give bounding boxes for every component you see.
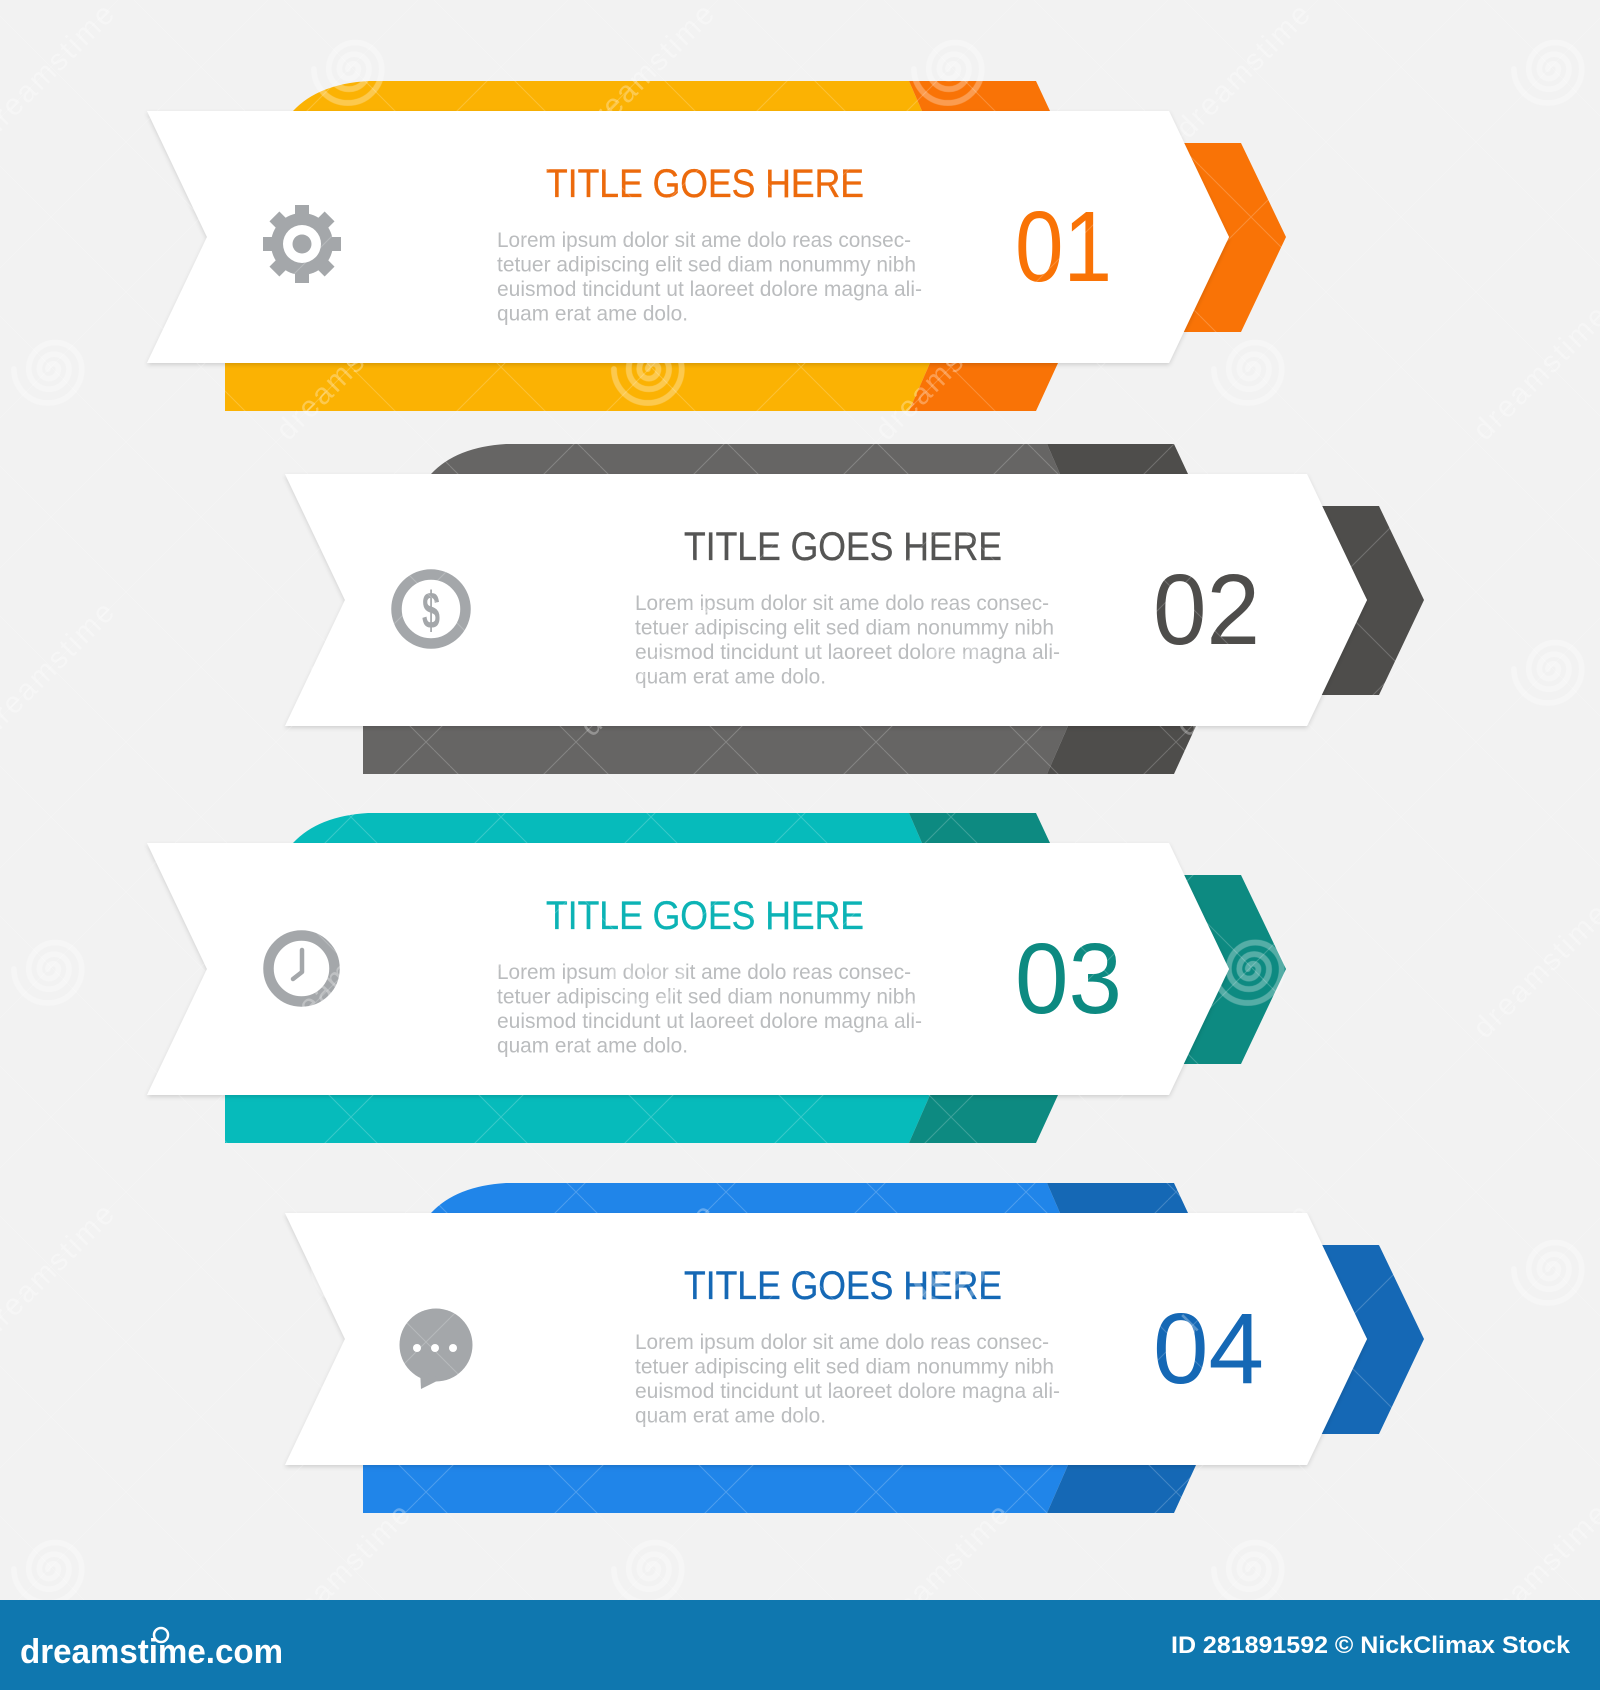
footer credit: ID 281891592 © NickClimax Stock — [1171, 1632, 1571, 1659]
white banner — [285, 1213, 1367, 1465]
bottom band — [225, 363, 1058, 411]
icon: dollar coin: $ — [422, 582, 440, 640]
bottom band — [363, 1465, 1196, 1513]
body text: quam erat ame dolo. — [497, 302, 688, 326]
white banner — [147, 111, 1229, 363]
body text — [497, 229, 922, 326]
panel: step 04 — [285, 1183, 1424, 1513]
panel: step 02 — [285, 444, 1424, 774]
body text: quam erat ame dolo. — [497, 1034, 688, 1058]
body text: Lorem ipsum dolor sit ame dolo reas consec- — [635, 1331, 1049, 1354]
title: TITLE GOES HERE — [684, 1264, 1002, 1308]
body text: tetuer adipiscing elit sed diam nonummy nibh — [497, 254, 916, 276]
body text: euismod tincidunt ut laoreet dolore magna ali- — [635, 1380, 1060, 1403]
icon: gear — [247, 189, 357, 299]
white banner — [285, 474, 1367, 726]
arrow chevron — [1318, 1245, 1424, 1434]
number: 03 — [1015, 923, 1122, 1035]
watermark overlay: dreamstime — [574, 1198, 721, 1345]
watermark overlay: dreamstime — [1170, 596, 1317, 743]
body text: euismod tincidunt ut laoreet dolore magna ali- — [497, 278, 922, 301]
body text: quam erat ame dolo. — [635, 1404, 826, 1428]
body text: tetuer adipiscing elit sed diam nonummy nibh — [497, 986, 916, 1008]
top band — [431, 444, 1188, 474]
watermark overlay: dreamstime — [270, 898, 417, 1045]
body text: Lorem ipsum dolor sit ame dolo reas consec- — [497, 229, 911, 252]
watermark overlay: dreamstime — [869, 300, 1016, 447]
number: 02 — [1153, 554, 1260, 666]
panel: step 03 — [147, 813, 1286, 1143]
top band — [293, 813, 1050, 843]
bottom band — [225, 1095, 1058, 1143]
footer logo: dreamstime.com — [20, 1633, 283, 1671]
watermark overlay: dreamstime — [574, 0, 721, 145]
body text: tetuer adipiscing elit sed diam nonummy nibh — [635, 1356, 1054, 1378]
bottom band — [363, 726, 1196, 774]
body text: tetuer adipiscing elit sed diam nonummy nibh — [635, 616, 1054, 640]
white banner — [147, 843, 1229, 1095]
watermark overlay: dreamstime — [1170, 1198, 1317, 1345]
watermark overlay: dreamstime — [1170, 0, 1317, 145]
body text — [497, 961, 922, 1058]
number: 01 — [1015, 191, 1112, 303]
arrow chevron — [1180, 875, 1286, 1064]
title: TITLE GOES HERE — [684, 525, 1002, 569]
watermark overlay: dreamstime — [270, 300, 417, 447]
body text: euismod tincidunt ut laoreet dolore magna ali- — [497, 1010, 922, 1033]
watermark overlay: dreamstime — [270, 1498, 417, 1645]
watermark overlay: dreamstime — [574, 596, 721, 743]
watermark overlay: dreamstime — [869, 1498, 1016, 1645]
top band — [293, 81, 1050, 111]
number: 04 — [1153, 1293, 1264, 1405]
title: TITLE GOES HERE — [546, 162, 864, 206]
body text: Lorem ipsum dolor sit ame dolo reas consec- — [497, 961, 911, 984]
arrow chevron — [1318, 506, 1424, 695]
body text — [635, 592, 1060, 688]
watermark overlay: dreamstime — [869, 898, 1016, 1045]
body text: quam erat ame dolo. — [635, 666, 826, 688]
icon: chat bubble — [400, 1308, 472, 1389]
body text — [635, 1331, 1060, 1428]
icon: dollar coin — [396, 574, 466, 644]
icon: clock — [268, 936, 334, 1002]
footer bar — [0, 1600, 1600, 1690]
arrow chevron — [1180, 143, 1286, 332]
body text: Lorem ipsum dolor sit ame dolo reas consec- — [635, 592, 1049, 615]
title: TITLE GOES HERE — [546, 894, 864, 938]
panel: step 01 — [147, 81, 1286, 411]
body text: euismod tincidunt ut laoreet dolore magna ali- — [635, 641, 1060, 664]
top band — [431, 1183, 1188, 1213]
